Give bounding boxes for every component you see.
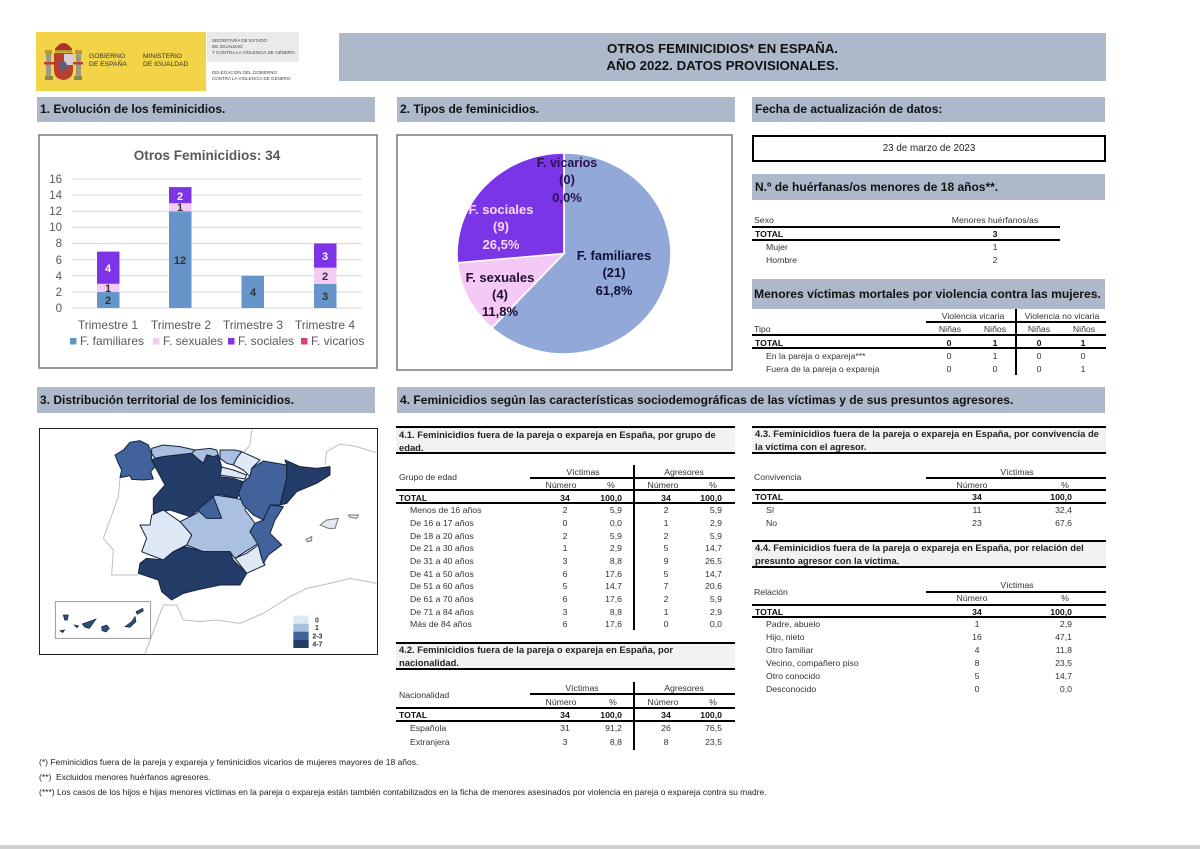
table 4.4: relationship: 0,0 <box>1060 684 1072 694</box>
heading: table 4.3 <box>752 426 1106 454</box>
logo text: delegation <box>212 70 291 81</box>
table 4.1: age group: 14,7 <box>705 569 722 579</box>
table 4.2: nationality: 76,5 <box>705 723 722 733</box>
heading: section 3: 3. Distribución territorial de los feminicidios. <box>40 393 294 407</box>
heading: child victims: Menores víctimas mortales por violencia contra las mujeres. <box>754 287 1101 301</box>
table 4.1: age group: 5,9 <box>710 505 722 515</box>
table 4.1: age group: 14,7 <box>605 581 622 591</box>
bar chart: evolution by quarter: 12 <box>174 255 186 267</box>
bar chart: evolution by quarter: 1 <box>105 283 111 295</box>
table: orphans by sex: 1 <box>993 242 997 252</box>
table 4.1: age group: De 31 a 40 años <box>410 556 474 566</box>
table 4.1: age group: De 61 a 70 años <box>410 594 474 604</box>
table: child victims: Tipo <box>754 324 771 334</box>
bottom strip <box>0 845 1200 849</box>
pie chart: types of feminicide: F. vicarios <box>537 156 597 170</box>
table 4.1: age group: 5,9 <box>610 505 622 515</box>
bar chart: evolution by quarter: 6 <box>56 255 62 267</box>
heading: section 1 <box>37 97 375 122</box>
heading: section 2: 2. Tipos de feminicidios. <box>400 102 539 116</box>
table 4.1: age group: 5 <box>563 581 567 591</box>
table 4.1: age group: 5,9 <box>710 594 722 604</box>
table: orphans by sex: Sexo <box>754 215 774 225</box>
table: child victims: Niños <box>984 324 1006 334</box>
table 4.1: age group: % <box>709 480 717 490</box>
table 4.1: age group: 5 <box>664 543 668 553</box>
map: territorial distribution: 0 <box>314 617 318 624</box>
table 4.4: relationship: 23,5 <box>1055 658 1072 668</box>
table: orphans by sex: TOTAL <box>755 229 783 239</box>
table 4.4: relationship: Hijo, nieto <box>766 632 805 642</box>
table 4.1: age group: Número <box>648 480 678 490</box>
table 4.2: nationality: 26 <box>661 723 671 733</box>
table 4.2: nationality: 91,2 <box>605 723 622 733</box>
table 4.4: relationship: % <box>1061 593 1069 603</box>
bar chart: evolution by quarter: Trimestre 2 <box>151 318 211 332</box>
table 4.2: nationality <box>396 682 735 750</box>
table 4.4: relationship: Padre, abuelo <box>766 618 820 628</box>
table 4.1: age group: 100,0 <box>600 493 622 503</box>
bar chart: evolution by quarter: 12 <box>49 206 62 218</box>
table 4.3: cohabitation: 100,0 <box>1050 492 1072 502</box>
table 4.4: relationship: 4 <box>975 644 979 654</box>
table 4.4: relationship: 14,7 <box>1055 670 1072 680</box>
logo text: secretary of state <box>212 38 295 55</box>
bar chart: evolution by quarter: 4 <box>250 287 257 299</box>
bar chart: evolution by quarter: Otros Feminicidios: 34 <box>134 148 281 163</box>
table 4.1: age group: TOTAL <box>399 493 427 503</box>
table 4.3: cohabitation <box>752 467 1106 528</box>
heading: section 3 <box>37 387 375 413</box>
table: orphans by sex: 2 <box>993 254 997 264</box>
table 4.2: nationality: % <box>609 697 617 707</box>
table 4.4: relationship: Vecino, compañero piso <box>766 658 859 668</box>
table 4.1: age group: 0,0 <box>610 518 622 528</box>
footnote 1: (*) Feminicidios fuera de la pareja y expareja y feminicidios vicarios de mujeres mayores de 18 años. <box>39 757 418 767</box>
pie chart: types of feminicide: F. familiares <box>577 248 651 263</box>
heading: orphans: N.º de huérfanas/os menores de 18 años**. <box>755 180 998 194</box>
table 4.1: age group: 14,7 <box>705 543 722 553</box>
table: child victims: 0 <box>1037 364 1041 374</box>
table 4.3: cohabitation: 11 <box>972 504 982 514</box>
table 4.4: relationship: 47,1 <box>1055 632 1072 642</box>
table 4.2: nationality: 100,0 <box>700 710 722 720</box>
icon: coat of arms <box>44 43 83 80</box>
table 4.1: age group: 2 <box>563 531 567 541</box>
table 4.1: age group: 34 <box>661 493 671 503</box>
table: child victims: 0 <box>947 338 951 348</box>
table 4.4: relationship: 100,0 <box>1050 606 1072 616</box>
table 4.1: age group: % <box>607 480 615 490</box>
bar chart: evolution by quarter: 0 <box>56 303 62 315</box>
pie chart: types of feminicide: (0) <box>559 172 575 187</box>
map: territorial distribution: 2-3 <box>312 633 322 640</box>
table: child victims: Violencia vicaria <box>942 311 1004 321</box>
table 4.4: relationship: Otro conocido <box>766 670 820 680</box>
heading: update date <box>752 97 1105 122</box>
table: child victims: TOTAL <box>755 338 783 348</box>
heading: table 4.4: 4.4. Feminicidios fuera de la pareja o expareja en España, por relación del <box>755 542 1084 553</box>
table 4.1: age group: 8,8 <box>610 556 622 566</box>
bar chart: evolution by quarter: 4 <box>105 263 112 275</box>
heading: section 2 <box>397 97 735 122</box>
bar chart: evolution by quarter: F. sociales <box>238 334 294 348</box>
table 4.4: relationship: 5 <box>975 670 979 680</box>
title: OTROS FEMINICIDIOS* EN ESPAÑA. <box>607 41 838 56</box>
pie chart: types of feminicide: F. sexuales <box>466 270 534 285</box>
pie chart: types of feminicide: 11,8% <box>482 304 519 319</box>
table 4.4: relationship: Víctimas <box>1000 580 1034 590</box>
table 4.2: nationality: Víctimas <box>565 683 599 693</box>
table 4.3: cohabitation: Número <box>957 480 987 490</box>
table 4.2: nationality: 34 <box>661 710 671 720</box>
table: child victims: Niñas <box>1028 324 1050 334</box>
heading: update date: Fecha de actualización de datos: <box>755 102 942 116</box>
table 4.4: relationship: 8 <box>975 658 979 668</box>
bar chart: evolution by quarter: F. sexuales <box>163 334 223 348</box>
table 4.4: relationship: 11,8 <box>1056 644 1072 654</box>
table 4.1: age group: 2 <box>664 531 668 541</box>
logo text: secretary of state: Y CONTRA LA VIOLENCIA DE GÉNERO <box>212 50 295 55</box>
table 4.4: relationship: Otro familiar <box>766 644 813 654</box>
table 4.1: age group: 0 <box>664 619 668 629</box>
pie chart: types of feminicide: F. sociales <box>468 202 534 217</box>
heading: table 4.3: la víctima con el agresor. <box>755 440 867 452</box>
table: child victims: En la pareja o expareja*** <box>766 350 866 360</box>
table 4.2: nationality: 3 <box>563 737 567 747</box>
table: child victims: 1 <box>1081 364 1085 374</box>
title <box>339 33 1106 81</box>
logo text: delegation: CONTRA LA VIOLENCIA DE GÉNERO <box>212 76 291 81</box>
bar chart: evolution by quarter: 10 <box>49 222 62 234</box>
table 4.2: nationality: % <box>709 697 717 707</box>
table 4.2: nationality: 23,5 <box>705 737 722 747</box>
table 4.1: age group: 17,6 <box>605 594 622 604</box>
footnote 2: (**) Excluidos menores huérfanos agresores. <box>39 772 210 782</box>
pie chart: types of feminicide: 0,0% <box>552 190 582 205</box>
table 4.1: age group: 5 <box>664 569 668 579</box>
table 4.1: age group: 2 <box>664 594 668 604</box>
bar chart: evolution by quarter: 8 <box>56 238 62 250</box>
table 4.1: age group: 6 <box>563 619 567 629</box>
table 4.2: nationality: 100,0 <box>600 710 622 720</box>
bar chart: evolution by quarter: 2 <box>56 287 62 299</box>
bar chart: evolution by quarter: Trimestre 4 <box>295 318 355 332</box>
table: orphans by sex: Hombre <box>766 254 797 264</box>
bar chart: evolution by quarter: 2 <box>322 271 328 283</box>
table 4.3: cohabitation: Sí <box>766 504 774 514</box>
date box <box>752 135 1106 162</box>
table: orphans by sex <box>752 215 1060 264</box>
heading: child victims <box>752 279 1105 309</box>
heading: section 4: 4. Feminicidios según las características sociodemográficas de las víctimas y de sus presuntos agresores. <box>400 393 1013 407</box>
table: child victims: 0 <box>1037 350 1041 360</box>
table 4.1: age group: 1 <box>664 607 668 617</box>
table 4.2: nationality: Número <box>546 697 576 707</box>
heading: orphans <box>752 174 1105 200</box>
table 4.1: age group: De 51 a 60 años <box>410 581 474 591</box>
table 4.3: cohabitation: 34 <box>972 492 982 502</box>
table 4.1: age group: 7 <box>664 581 668 591</box>
table 4.1: age group <box>396 465 735 630</box>
table 4.1: age group: 34 <box>560 493 570 503</box>
table 4.1: age group: 1 <box>563 543 567 553</box>
table: child victims: 0 <box>947 350 951 360</box>
heading: table 4.2 <box>396 642 735 670</box>
logo text: delegation: DELEGACIÓN DEL GOBIERNO <box>212 70 277 75</box>
table 4.1: age group: De 21 a 30 años <box>410 543 474 553</box>
bar chart: evolution by quarter: F. vicarios <box>311 334 364 348</box>
table 4.1: age group: Agresores <box>664 467 704 477</box>
table: child victims <box>752 309 1106 375</box>
table 4.1: age group: Menos de 16 años <box>410 505 481 515</box>
table 4.1: age group: De 41 a 50 años <box>410 569 474 579</box>
table 4.1: age group: 1 <box>664 518 668 528</box>
table 4.2: nationality: Extranjera <box>410 737 450 747</box>
table: child victims: 1 <box>993 338 997 348</box>
table 4.1: age group: De 18 a 20 años <box>410 531 474 541</box>
table 4.1: age group: 3 <box>563 607 567 617</box>
table 4.1: age group: 0,0 <box>710 619 722 629</box>
table 4.3: cohabitation: No <box>766 518 777 528</box>
table 4.4: relationship: Relación <box>754 587 788 597</box>
heading: table 4.3: 4.3. Feminicidios fuera de la pareja o expareja en España, por convivencia de <box>755 428 1099 439</box>
date box: 23 de marzo de 2023 <box>883 143 975 154</box>
table 4.4: relationship: 34 <box>972 606 982 616</box>
bar chart: evolution by quarter: 2 <box>177 191 183 203</box>
logo text: ministry: MINISTERIO <box>143 53 182 60</box>
heading: section 4 <box>397 387 1105 413</box>
table 4.3: cohabitation: TOTAL <box>755 492 783 502</box>
heading: table 4.1 <box>396 426 735 454</box>
table 4.3: cohabitation: 67,6 <box>1055 518 1072 528</box>
heading: table 4.1: 4.1. Feminicidios fuera de la pareja o expareja en España, por grupo de <box>399 429 716 440</box>
heading: table 4.2: nacionalidad. <box>399 656 459 668</box>
table 4.2: nationality: 8,8 <box>610 737 622 747</box>
table: child victims: 0 <box>1037 338 1041 348</box>
logo text: secretary of state: DE IGUALDAD <box>212 44 243 49</box>
table 4.2: nationality: TOTAL <box>399 710 427 720</box>
table 4.4: relationship: TOTAL <box>755 606 783 616</box>
bar chart: evolution by quarter: 2 <box>105 295 111 307</box>
table 4.3: cohabitation: % <box>1061 480 1069 490</box>
bar chart: evolution by quarter: 3 <box>322 291 328 303</box>
table 4.4: relationship: 1 <box>975 618 979 628</box>
table 4.4: relationship <box>752 580 1106 694</box>
pie chart: types of feminicide: (21) <box>602 265 626 280</box>
table 4.1: age group: Número <box>546 480 576 490</box>
logo text: government: DE ESPAÑA <box>89 61 127 68</box>
logo text: ministry <box>143 53 188 68</box>
bar chart: evolution by quarter <box>38 134 378 369</box>
table 4.1: age group: 5,9 <box>610 531 622 541</box>
bar chart: evolution by quarter: 1 <box>177 202 183 214</box>
logo text: government <box>89 53 127 68</box>
table 4.1: age group: 6 <box>563 569 567 579</box>
pie chart: types of feminicide <box>396 134 733 371</box>
table 4.1: age group: De 16 a 17 años <box>410 518 474 528</box>
map: territorial distribution: 4-7 <box>312 641 322 648</box>
table 4.1: age group: 17,6 <box>605 569 622 579</box>
table 4.1: age group: Grupo de edad <box>399 472 457 482</box>
map: territorial distribution <box>39 428 378 655</box>
table: child victims: Fuera de la pareja o expareja <box>766 364 880 374</box>
bar chart: evolution by quarter: 16 <box>49 174 62 186</box>
heading: table 4.1: edad. <box>399 442 424 453</box>
table 4.2: nationality: 34 <box>560 710 570 720</box>
table 4.4: relationship: 2,9 <box>1060 618 1072 628</box>
table 4.1: age group: Más de 84 años <box>410 619 472 629</box>
table: child victims: Niñas <box>939 324 961 334</box>
table 4.1: age group: 20,6 <box>705 581 722 591</box>
table 4.1: age group: Víctimas <box>566 467 600 477</box>
table 4.1: age group: 8,8 <box>610 607 622 617</box>
bar chart: evolution by quarter: 3 <box>322 251 328 263</box>
heading: table 4.2: 4.2. Feminicidios fuera de la pareja o expareja en España, por <box>399 644 673 655</box>
table 4.2: nationality: Española <box>410 723 446 733</box>
table 4.1: age group: 6 <box>563 594 567 604</box>
table 4.1: age group: 9 <box>664 556 668 566</box>
footnote 3: (***) Los casos de los hijos e hijas menores víctimas en la pareja o expareja están también contabilizados en la ficha de menores asesinados por violencia en pareja o expareja contra su madre. <box>39 787 767 797</box>
table: orphans by sex: 3 <box>993 229 997 239</box>
table 4.4: relationship: Número <box>957 593 987 603</box>
logo text: government: GOBIERNO <box>89 53 125 60</box>
heading: table 4.4 <box>752 540 1106 568</box>
table: orphans by sex: Mujer <box>766 242 788 252</box>
table 4.1: age group: 26,5 <box>705 556 722 566</box>
table 4.4: relationship: 0 <box>975 684 979 694</box>
table 4.4: relationship: 16 <box>972 632 982 642</box>
table 4.3: cohabitation: 23 <box>972 518 982 528</box>
bar chart: evolution by quarter: Trimestre 3 <box>223 318 283 332</box>
table 4.1: age group: 2,9 <box>710 518 722 528</box>
table: orphans by sex: Menores huérfanos/as <box>952 215 1038 225</box>
pie chart: types of feminicide: 61,8% <box>596 283 633 298</box>
heading: section 1: 1. Evolución de los feminicidios. <box>40 102 225 116</box>
table 4.1: age group: 5,9 <box>710 531 722 541</box>
logo text: secretary of state: SECRETARÍA DE ESTADO <box>212 38 267 43</box>
table: child victims: Niños <box>1073 324 1095 334</box>
table 4.2: nationality: 31 <box>560 723 570 733</box>
table 4.4: relationship: Desconocido <box>766 684 816 694</box>
logo: Gobierno de España, Ministerio de Igualdad <box>36 32 299 91</box>
table: child victims: 0 <box>947 364 951 374</box>
logo text: ministry: DE IGUALDAD <box>143 61 188 68</box>
pie chart: types of feminicide: (9) <box>493 219 509 234</box>
heading: table 4.4: presunto agresor con la víctima. <box>755 554 899 566</box>
bar chart: evolution by quarter: F. familiares <box>80 334 144 348</box>
table 4.1: age group: 17,6 <box>605 619 622 629</box>
table 4.1: age group: 3 <box>563 556 567 566</box>
table 4.1: age group: 2 <box>664 505 668 515</box>
table 4.1: age group: 2,9 <box>710 607 722 617</box>
table 4.1: age group: 2 <box>563 505 567 515</box>
pie chart: types of feminicide: (4) <box>492 287 508 302</box>
table 4.1: age group: 0 <box>563 518 567 528</box>
table 4.3: cohabitation: Convivencia <box>754 472 801 482</box>
bar chart: evolution by quarter: Trimestre 1 <box>78 318 138 332</box>
table 4.2: nationality: Agresores <box>664 683 704 693</box>
table: child victims: 1 <box>1081 338 1085 348</box>
table: child victims: 0 <box>993 364 997 374</box>
table 4.2: nationality: Nacionalidad <box>399 690 449 700</box>
table: child victims: 0 <box>1081 350 1085 360</box>
table: child victims: 1 <box>993 350 997 360</box>
table 4.1: age group: 100,0 <box>700 493 722 503</box>
table 4.1: age group: De 71 a 84 años <box>410 607 474 617</box>
pie chart: types of feminicide: 26,5% <box>483 237 520 252</box>
table 4.3: cohabitation: 32,4 <box>1055 504 1072 514</box>
bar chart: evolution by quarter: 14 <box>49 190 63 202</box>
table: child victims: Violencia no vicaria <box>1025 311 1099 321</box>
bar chart: evolution by quarter: 4 <box>56 271 63 283</box>
table 4.2: nationality: 8 <box>664 737 668 747</box>
title: AÑO 2022. DATOS PROVISIONALES. <box>606 58 839 73</box>
map: territorial distribution: 1 <box>314 624 318 632</box>
table 4.1: age group: 2,9 <box>610 543 622 553</box>
table 4.3: cohabitation: Víctimas <box>1000 467 1034 477</box>
table 4.2: nationality: Número <box>648 697 678 707</box>
